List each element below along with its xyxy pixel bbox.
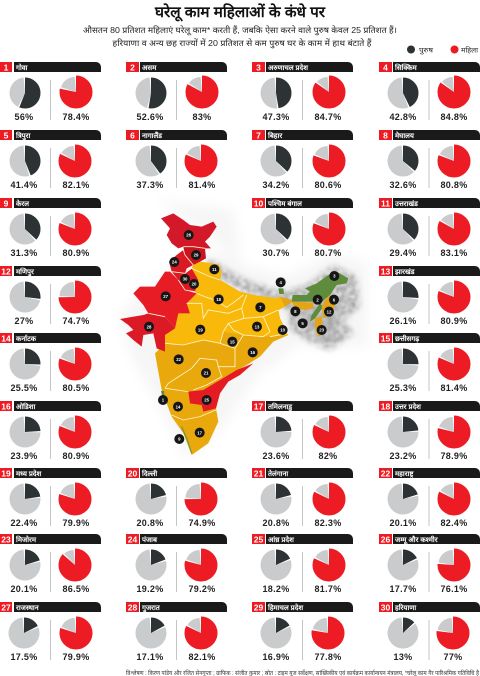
card 23: 20.1% — [10, 584, 38, 594]
card 4: सिक्किम — [394, 63, 418, 72]
card 27: 17.5% — [10, 652, 38, 662]
card 7: 80.6% — [314, 180, 342, 190]
card 22: 82.4% — [440, 518, 468, 528]
card 20 — [126, 468, 227, 528]
card 8: 8 — [383, 130, 388, 140]
map number markers: 17 — [197, 430, 203, 435]
legend — [407, 46, 478, 54]
card 26: जम्मू और कश्मीर — [394, 535, 439, 545]
card 10 — [252, 198, 353, 258]
card 11: 11 — [381, 198, 390, 208]
map number markers: 28 — [147, 324, 152, 329]
map number markers: 11 — [212, 267, 217, 272]
card 5 — [0, 130, 101, 190]
legend: पुरुष — [419, 48, 434, 54]
card 3: 3 — [256, 62, 261, 72]
map number markers: 23 — [319, 328, 325, 333]
card 17: तमिलनाडु — [267, 402, 293, 412]
card 28: 28 — [128, 602, 137, 612]
card 26: 17.7% — [389, 584, 417, 594]
card 5: 82.1% — [62, 180, 90, 190]
card 1: 56% — [15, 112, 33, 122]
card 26: 76.1% — [440, 584, 468, 594]
map of India — [120, 200, 367, 460]
map number markers: 16 — [250, 350, 256, 355]
card 22: 22 — [381, 468, 390, 478]
card 24: 79.2% — [188, 584, 216, 594]
map number markers: 15 — [230, 339, 235, 344]
map number markers: 3 — [333, 274, 336, 279]
map number markers: 4 — [279, 280, 282, 285]
card 1: 78.4% — [62, 112, 90, 122]
card 15: 81.4% — [440, 383, 468, 393]
card 5: त्रिपुरा — [15, 131, 32, 141]
map number markers: 30 — [183, 277, 188, 282]
card 11: 83.1% — [440, 248, 468, 258]
card 8: 32.6% — [389, 180, 417, 190]
card 15: 15 — [381, 334, 390, 344]
card 26 — [379, 534, 480, 594]
card 19: मध्य प्रदेश — [15, 469, 43, 478]
map number markers: 1 — [162, 398, 165, 403]
card 28: 82.1% — [188, 652, 216, 662]
card 25: 81.7% — [314, 584, 342, 594]
card 2: 2 — [130, 62, 135, 72]
card 28: 17.1% — [136, 652, 164, 662]
map number markers — [144, 230, 339, 444]
card 12 — [0, 266, 101, 326]
subtitle line 2: हरियाणा व अन्य छह राज्यों में 20 प्रतिशत से कम पुरुष घर के काम में हाथ बंटाते हैं — [112, 38, 372, 49]
card 30: 30 — [381, 602, 390, 612]
card 13: 80.9% — [440, 316, 468, 326]
card 29: 16.9% — [262, 652, 290, 662]
card 17: 82% — [319, 451, 337, 461]
card 16: 23.9% — [10, 451, 38, 461]
map number markers: 8 — [294, 309, 297, 314]
card 9: 31.3% — [10, 248, 38, 258]
card 25: 25 — [254, 534, 263, 544]
map number markers: 20 — [192, 282, 197, 287]
map number markers: 21 — [204, 371, 209, 376]
card 14: 80.5% — [62, 383, 90, 393]
card 18: 78.9% — [440, 451, 468, 461]
card 25 — [252, 534, 353, 594]
card 14: कर्नाटक — [15, 334, 37, 343]
card 19: 19 — [1, 468, 11, 478]
card 23: 86.5% — [62, 584, 90, 594]
card 28 — [126, 602, 227, 662]
card 6 — [126, 130, 227, 190]
card 18 — [379, 401, 480, 461]
card 21: तेलंगाना — [267, 469, 289, 478]
card 4: 4 — [383, 62, 388, 72]
card 3: अरुणाचल प्रदेश — [268, 63, 309, 72]
card 8: मेघालय — [394, 131, 415, 140]
card 23 — [0, 534, 101, 594]
card 9: केरल — [15, 199, 29, 208]
card 28: गुजरात — [141, 605, 161, 613]
card 21 — [252, 468, 353, 528]
card 2: असम — [142, 65, 157, 72]
card 19 — [0, 468, 101, 528]
card 27: 27 — [1, 602, 11, 612]
card 1 — [0, 62, 101, 122]
card 11 — [379, 198, 480, 258]
card 8 — [379, 130, 480, 190]
card 21: 21 — [254, 468, 263, 478]
map number markers: 12 — [327, 309, 332, 314]
map number markers: 10 — [280, 328, 286, 333]
card 2: 52.6% — [136, 112, 164, 122]
card 10: 80.7% — [314, 248, 342, 258]
map number markers: 26 — [186, 233, 192, 238]
card 3: 84.7% — [314, 112, 342, 122]
card 5: 5 — [4, 130, 9, 140]
card 18: 18 — [381, 402, 390, 412]
map number markers: 18 — [216, 297, 222, 302]
card 5: 41.4% — [10, 180, 38, 190]
card 2 — [126, 62, 227, 122]
card 19: 79.9% — [62, 518, 90, 528]
map number markers: 24 — [172, 260, 177, 265]
card 3: 47.3% — [262, 112, 290, 122]
card 7: 34.2% — [262, 180, 290, 190]
card 17: 17 — [254, 402, 263, 412]
card 8: 80.8% — [440, 180, 468, 190]
card 9: 80.9% — [62, 248, 90, 258]
card 2: 83% — [193, 112, 211, 122]
map number markers: 6 — [333, 297, 336, 302]
legend: महिला — [461, 46, 478, 54]
card 13 — [379, 266, 480, 326]
card 14: 25.5% — [10, 383, 38, 393]
card 9: 9 — [4, 198, 9, 208]
map number markers: 2 — [316, 297, 319, 302]
card 22: 20.1% — [389, 518, 417, 528]
card 12: 27% — [15, 316, 33, 326]
card 7 — [252, 130, 353, 190]
card 14 — [0, 333, 101, 393]
map number markers: 22 — [176, 357, 182, 362]
card 20: 20.8% — [136, 518, 164, 528]
card 27 — [0, 602, 101, 662]
card 15: छत्तीसगढ़ — [394, 334, 420, 343]
card 7: 7 — [256, 130, 261, 140]
card 15: 25.3% — [389, 383, 417, 393]
map number markers: 9 — [178, 437, 181, 442]
card 25: 18.2% — [262, 584, 290, 594]
card 12: 74.7% — [62, 316, 90, 326]
card 18: उत्तर प्रदेश — [394, 402, 422, 411]
map number markers: 29 — [194, 253, 199, 258]
card 6: 37.3% — [136, 180, 164, 190]
card 24: 19.2% — [136, 584, 164, 594]
card 23: मिजोरम — [15, 535, 37, 544]
card 22: महाराष्ट्र — [394, 471, 414, 478]
card 30 — [379, 602, 480, 662]
card 30: हरियाणा — [394, 603, 417, 612]
card 16: 80.9% — [62, 451, 90, 461]
card 4 — [379, 62, 480, 122]
card 12: मणिपुर — [15, 267, 35, 277]
card 14: 14 — [1, 334, 11, 344]
card 24: पंजाब — [141, 536, 158, 544]
card 6: 81.4% — [188, 180, 216, 190]
map number markers: 7 — [259, 305, 262, 310]
card 26: 26 — [381, 534, 390, 544]
card 3 — [252, 62, 353, 122]
card 15 — [379, 333, 480, 393]
card 25: आंध्र प्रदेश — [268, 535, 295, 544]
map number markers: 25 — [204, 398, 210, 403]
card 1: गोवा — [15, 63, 29, 72]
card 20: दिल्ली — [141, 469, 158, 478]
card 13: 13 — [381, 266, 390, 276]
card 29 — [252, 602, 353, 662]
card 6: नागालैंड — [141, 131, 162, 140]
card 23: 23 — [1, 534, 11, 544]
card 29: 29 — [254, 602, 263, 612]
map number markers: 5 — [301, 321, 304, 326]
card 17 — [252, 401, 353, 461]
card 10: 10 — [254, 198, 263, 208]
card 24 — [126, 534, 227, 594]
card 27: 79.9% — [62, 652, 90, 662]
card 20: 74.9% — [188, 518, 216, 528]
title: घरेलू काम महिलाओं के कंधे पर — [154, 3, 326, 22]
card 16: ओडिशा — [16, 402, 36, 411]
card 12: 12 — [1, 266, 11, 276]
card 29: 77.8% — [314, 652, 342, 662]
card 20: 20 — [128, 468, 137, 478]
subtitle line 1: औसतन 80 प्रतिशत महिलाएं घरेलू काम* करती हैं, जबकि ऐसा करने वाले पुरुष केवल 25 प्रतिशत हैं। — [83, 25, 397, 36]
card 4: 84.8% — [440, 112, 468, 122]
card 30: 13% — [394, 652, 412, 662]
card 9 — [0, 198, 101, 258]
card 21: 82.3% — [314, 518, 342, 528]
card 6: 6 — [130, 130, 135, 140]
card 24: 24 — [128, 534, 137, 544]
card 27: राजस्थान — [15, 605, 40, 612]
card 18: 23.2% — [389, 451, 417, 461]
card 11: 29.4% — [389, 248, 417, 258]
card 17: 23.6% — [262, 451, 290, 461]
card 16 — [0, 401, 101, 461]
card 29: हिमाचल प्रदेश — [267, 603, 304, 612]
card 22 — [379, 468, 480, 528]
map number markers: 14 — [176, 404, 181, 409]
card 13: झारखंड — [394, 268, 415, 276]
map number markers: 13 — [255, 324, 260, 329]
card 19: 22.4% — [10, 518, 38, 528]
card 16: 16 — [1, 402, 11, 412]
card 10: पश्चिम बंगाल — [267, 199, 302, 208]
card 10: 30.7% — [262, 248, 290, 258]
card 11: उत्तराखंड — [394, 200, 418, 208]
card 1: 1 — [4, 62, 9, 72]
map number markers: 19 — [198, 327, 203, 332]
card 30: 77% — [444, 652, 462, 662]
card 7: बिहार — [267, 131, 283, 140]
card 21: 20.8% — [262, 518, 290, 528]
card 13: 26.1% — [389, 316, 417, 326]
card 4: 42.8% — [389, 112, 417, 122]
map number markers: 27 — [163, 294, 169, 299]
